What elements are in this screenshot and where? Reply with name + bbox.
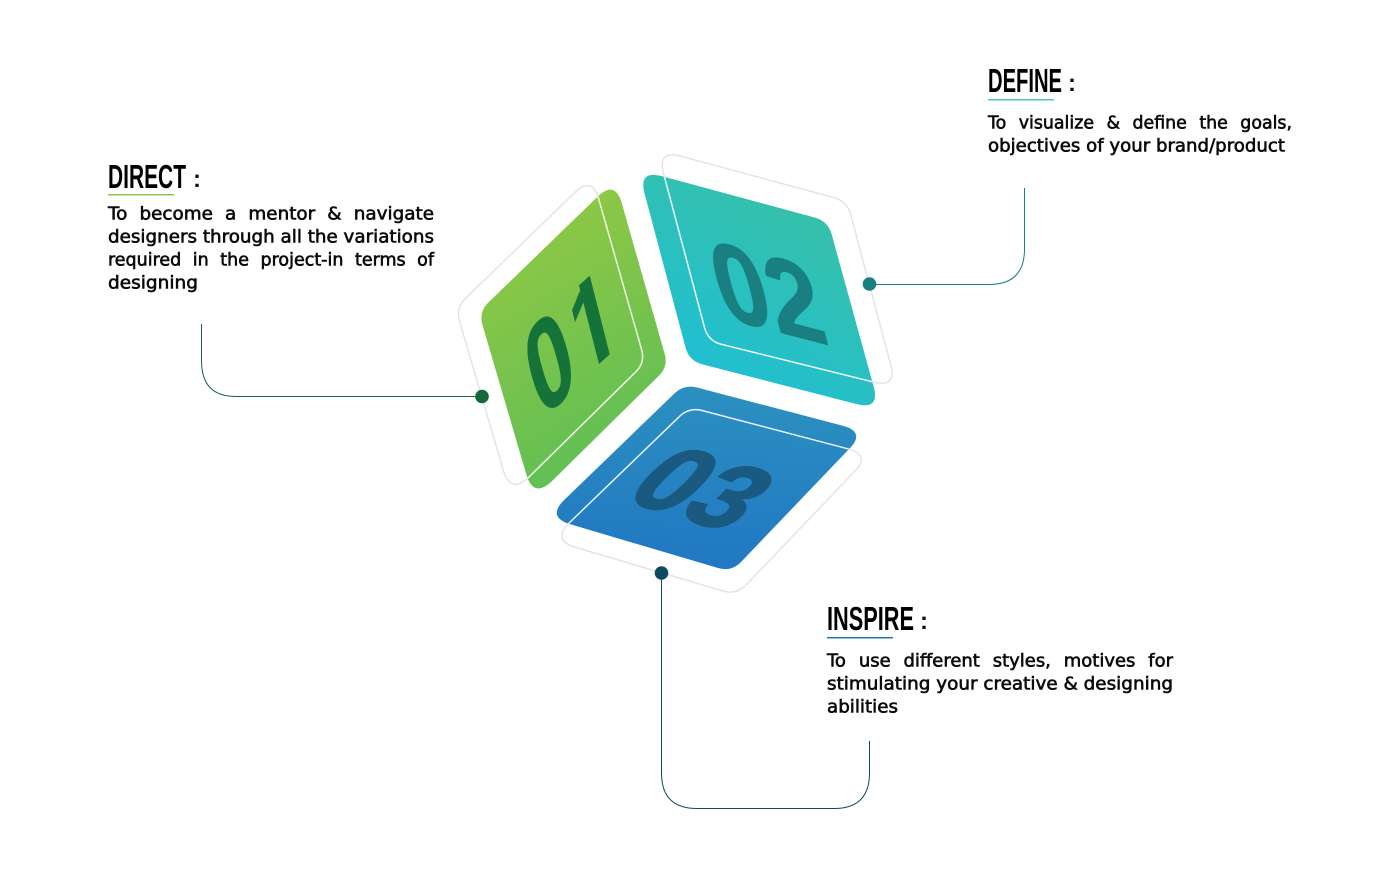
block 03 inner outline [568,408,850,524]
panel: inspire connector line [662,573,870,808]
panel: block 01 [458,186,666,488]
panel: define connector line [869,188,1024,284]
number 01: 1 [558,242,630,402]
body text: inspire [826,652,1174,718]
body text: define: objectives of your brand/product [988,136,1285,156]
number 01: 0 [512,280,588,446]
text block: direct [107,158,435,294]
block 02 outline [662,155,892,383]
body text: inspire: abilities [827,698,898,718]
body text: direct [107,204,435,294]
block 01 outline [458,186,643,484]
body text: inspire: stimulating your creative & designing [827,674,1173,694]
body text: direct: required in the project-in terms of [108,250,435,270]
text block: inspire [826,600,1174,718]
heading colon: direct: : [193,166,201,193]
panel: direct connector line [202,324,482,396]
block 01 inner outline [528,196,644,479]
block 02 inner outline [664,176,872,383]
body text: direct: To become a mentor & navigate [107,204,434,224]
panel: block 03 [557,387,861,592]
heading underline: inspire [827,637,893,638]
text block: define [987,62,1292,156]
body text: inspire: To use different styles, motives for [826,652,1174,672]
body text: direct: designing [108,274,198,294]
panel: block 02 [643,155,892,405]
block 02 face [643,175,875,405]
icon: inspire connector dot [655,566,668,580]
number 03: 03 [604,427,801,549]
block 03 outline [562,410,861,592]
heading: define: DEFINE [988,62,1062,99]
icon: define connector dot [863,277,876,291]
icon: direct connector dot [475,390,489,403]
body text: define [987,114,1292,156]
body text: direct: designers through all the variations [108,228,434,248]
heading underline: define [988,99,1054,100]
body text: define: To visualize & define the goals, [987,114,1292,134]
heading: inspire: INSPIRE [827,600,914,637]
heading colon: define: : [1068,70,1076,97]
heading colon: inspire: : [920,608,928,635]
block 03 face [557,387,856,569]
heading: direct: DIRECT [108,158,186,195]
heading underline: direct [108,194,174,196]
block 01 face [481,190,666,488]
number 02: 02 [696,215,838,371]
number 01 [527,276,610,408]
